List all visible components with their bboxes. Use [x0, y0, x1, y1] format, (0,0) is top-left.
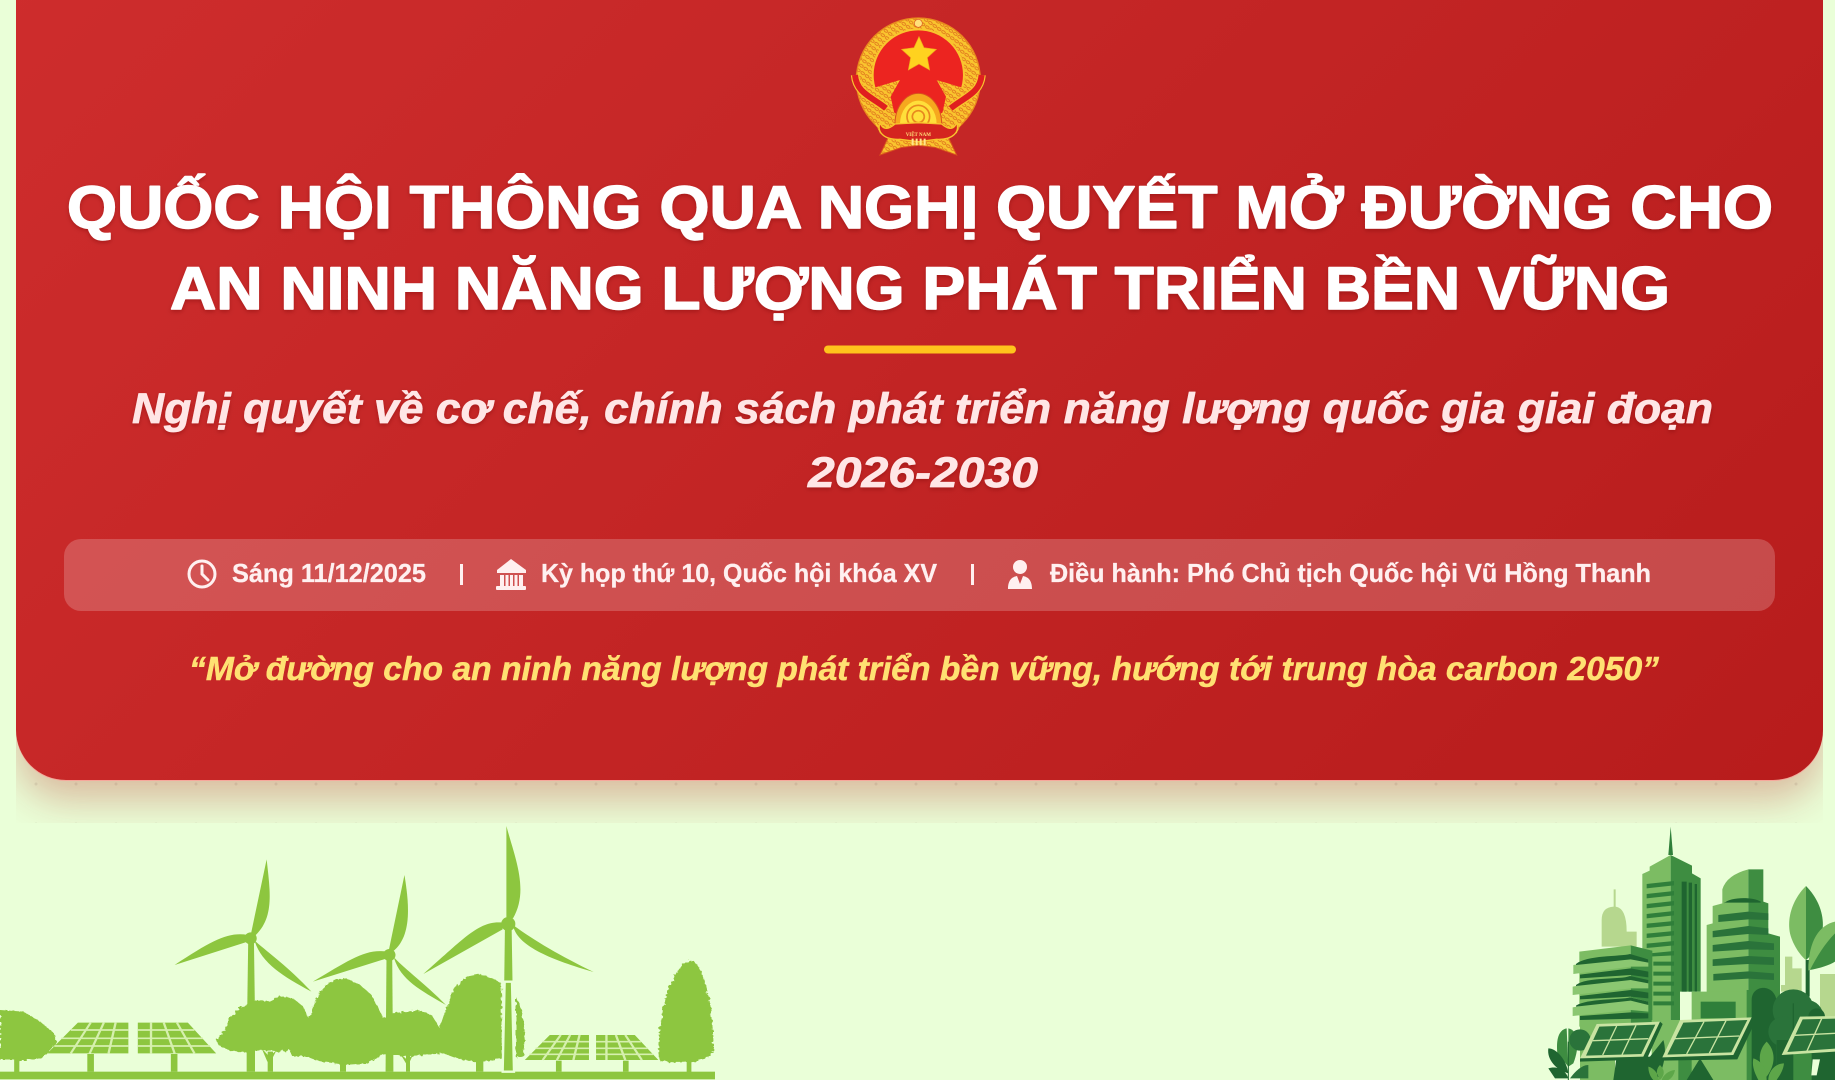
pale background buildings: [1602, 889, 1835, 1017]
trees and leaves: [1548, 886, 1835, 1080]
tree at left edge: [0, 1010, 57, 1060]
subtitle: [132, 385, 1713, 497]
stepped building: [1707, 869, 1780, 1027]
meeting time: Sáng 11/12/2025: [232, 558, 426, 588]
title: [67, 174, 1773, 322]
illustration: wind turbines, trees and solar panels: [0, 826, 715, 1079]
separator: [460, 564, 463, 585]
ground: [0, 1072, 715, 1079]
quote: “Mở đường cho an ninh năng lượng phát triển bền vững, hướng tới trung hòa carbon 2050”: [189, 650, 1660, 687]
tree canopies: [217, 974, 525, 1065]
tall cypress: [658, 960, 714, 1062]
icon: person: [1008, 560, 1032, 589]
title: AN NINH NĂNG LƯỢNG PHÁT TRIỂN BỀN VỮNG: [170, 255, 1670, 322]
turbine 2: [313, 875, 446, 1072]
panel: red header: [16, 0, 1823, 823]
solar panels: [47, 1023, 658, 1072]
subtitle: 2026-2030: [807, 449, 1038, 497]
tree line: [217, 974, 525, 1072]
icon: national emblem: [855, 17, 982, 155]
illustration: green city with solar panels: [1548, 827, 1835, 1080]
tree trunk at left edge: [14, 1057, 19, 1072]
title: QUỐC HỘI THÔNG QUA NGHỊ QUYẾT MỞ ĐƯỜNG CHO: [67, 174, 1773, 241]
turbine 1: [175, 859, 311, 1005]
terrace building: [1573, 945, 1652, 1027]
title divider: [824, 346, 1016, 354]
info bar: [64, 539, 1775, 611]
session: Kỳ họp thứ 10, Quốc hội khóa XV: [541, 558, 938, 588]
subtitle: Nghị quyết về cơ chế, chính sách phát triển năng lượng quốc gia giai đoạn: [132, 385, 1713, 433]
icon: parliament building: [496, 559, 526, 590]
solar panels: [1580, 1016, 1835, 1062]
low block: [1580, 990, 1780, 1080]
tower: [1642, 827, 1701, 1027]
icon: clock: [189, 561, 215, 587]
turbine 3: [423, 826, 594, 1072]
tree trunks: [247, 1050, 483, 1072]
separator: [971, 564, 974, 585]
moderator: Điều hành: Phó Chủ tịch Quốc hội Vũ Hồng Thanh: [1050, 558, 1651, 588]
cypress trunk: [687, 1062, 691, 1072]
icon: national emblem: VIỆT NAM: [906, 132, 931, 138]
tower overlap: [503, 982, 514, 1072]
